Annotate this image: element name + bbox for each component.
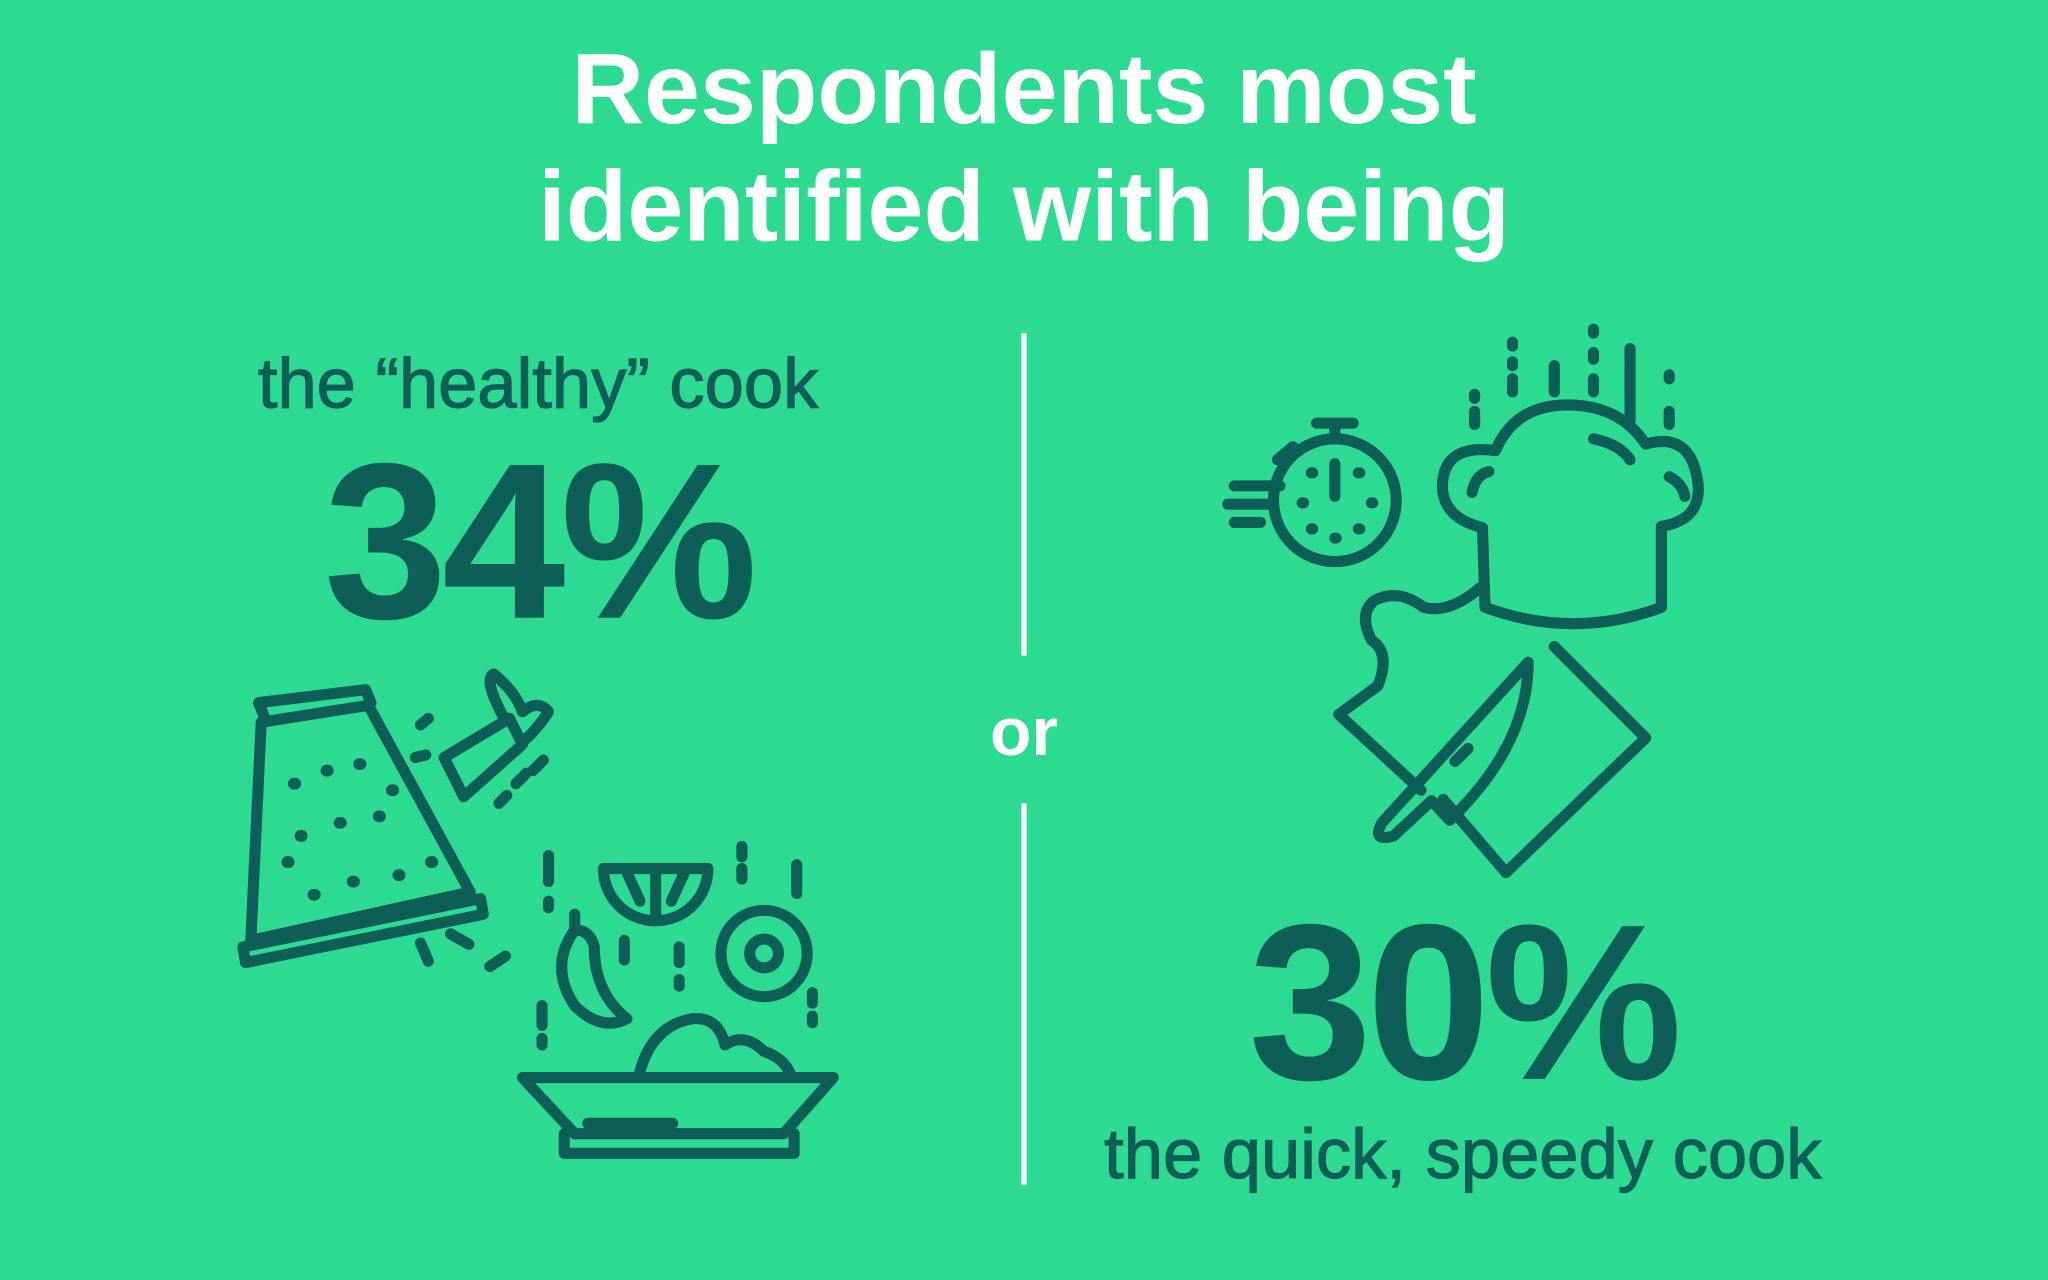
dashes [542,846,812,1045]
lemon [603,869,708,921]
left stat 34%: 34% [324,418,752,666]
title: identified with being [538,150,1510,262]
title: Respondents most [571,33,1477,145]
title [538,33,1510,262]
icon: stopwatch, chef hat, cutting board, knife [1228,329,1698,872]
or label: or [990,695,1058,770]
carrot [444,718,522,797]
bowl [522,1078,833,1134]
right label: quick speedy cook: the quick, speedy cook [1104,1114,1822,1193]
right stat 30%: 30% [1248,879,1677,1127]
divider line [1022,333,1026,1185]
left label: healthy cook: the “healthy” cook [258,344,819,423]
ring [721,910,807,997]
chili [562,930,627,1023]
icon: grater and vegetables [243,674,833,1153]
